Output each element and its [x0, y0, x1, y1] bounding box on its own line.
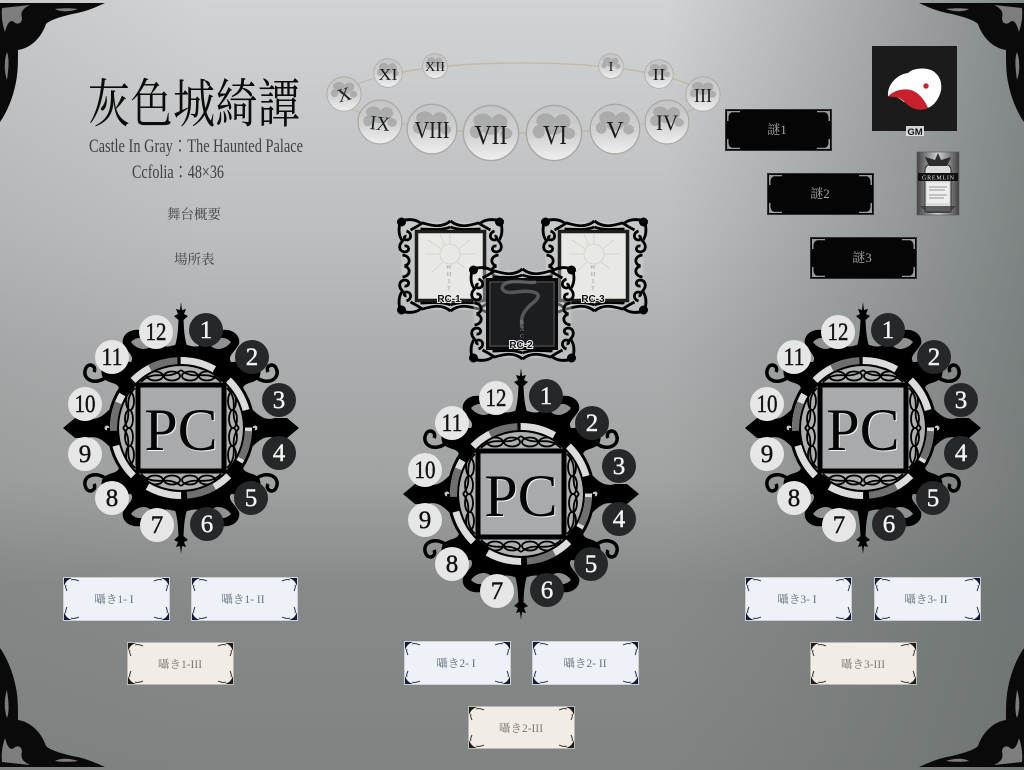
corner ornament top left: [0, 3, 105, 122]
GM label: GM: [907, 127, 923, 138]
moon IX: IX: [369, 112, 392, 136]
moon VI: VI: [543, 120, 567, 150]
icon: sun: [570, 234, 620, 272]
PC clock left: [63, 302, 299, 554]
whisper card 3-II: 囁き3- II: [904, 593, 948, 606]
moon II: [645, 60, 673, 88]
clock numbers: 1: [200, 317, 212, 344]
moon VII: VII: [474, 120, 508, 150]
whisper card 1-I: 囁き1- I: [94, 593, 134, 606]
whisper card 3-II: [874, 578, 980, 620]
RC frame 1: [397, 218, 504, 314]
PC text: PC: [144, 397, 218, 463]
whisper card 2-II: 囁き2- II: [563, 657, 607, 670]
RC frame 3: T: [591, 286, 595, 292]
moon VIII: VIII: [414, 118, 450, 144]
RC-2 label: RC-2: [509, 340, 533, 351]
clock numbers: 6: [201, 511, 213, 538]
PC clock right: [745, 302, 981, 554]
moon IV: [645, 100, 689, 144]
icon: bird: [888, 69, 941, 110]
icon: smoke: [502, 281, 538, 328]
whisper card 1-I: [64, 578, 170, 620]
clock numbers: 4: [613, 506, 626, 533]
clock numbers: 4: [273, 440, 286, 467]
ccfolia size: Ccfolia：48×36: [132, 162, 224, 183]
moon I: [599, 54, 623, 78]
whisper card 2-I: 囁き2- I: [436, 657, 476, 670]
clock numbers: 9: [419, 507, 431, 534]
RC frame 1: I: [448, 279, 450, 285]
subtitle: Castle In Gray：The Haunted Palace: [89, 136, 303, 157]
RC frame 2: [469, 266, 576, 362]
whisper card 3-I: [746, 578, 852, 620]
clock numbers: 10: [756, 391, 778, 418]
PC text: PC: [484, 463, 558, 529]
RC frame 3: I: [592, 279, 594, 285]
clock numbers: 11: [102, 344, 122, 371]
clock numbers: 2: [586, 410, 598, 437]
moon XI: [374, 59, 402, 87]
RC frame 3: H: [591, 272, 596, 278]
moon IX: [358, 100, 402, 144]
whisper card 1-III: 囁き1-III: [158, 658, 202, 671]
clock numbers: 4: [955, 440, 968, 467]
clock numbers: [68, 313, 296, 542]
clock numbers: 9: [79, 441, 91, 468]
clock numbers: [750, 313, 978, 542]
clock numbers: 7: [491, 578, 503, 605]
riddle card 2: 謎2: [810, 186, 830, 201]
clock numbers: 7: [833, 512, 845, 539]
clock numbers: 8: [788, 485, 800, 512]
clock numbers: 3: [273, 387, 285, 414]
clock numbers: 11: [442, 410, 462, 437]
moon XI: XI: [378, 65, 398, 84]
clock numbers: 10: [414, 457, 436, 484]
moon X: [327, 77, 361, 111]
RC frame 3: W: [590, 265, 596, 271]
clock numbers: 12: [828, 319, 848, 346]
riddle card 1: 謎1: [767, 122, 787, 137]
moon VIII: [407, 104, 457, 154]
clock numbers: 1: [540, 383, 552, 410]
whisper card 3-III: [810, 642, 916, 684]
moon X: X: [335, 83, 354, 107]
link: location table: 場所表: [174, 251, 215, 267]
RC frame 1: W: [446, 265, 452, 271]
clock numbers: 12: [486, 385, 506, 412]
RC frame 1: H: [447, 272, 452, 278]
moon XII: XII: [425, 60, 445, 75]
RC frame 2: C: [520, 334, 524, 340]
whisper card 1-III: [128, 642, 234, 684]
RC frame 2: A: [520, 327, 525, 333]
whisper card 2-III: 囁き2-III: [499, 722, 543, 735]
link: stage overview: 舞台概要: [167, 206, 221, 222]
moon III: III: [694, 85, 712, 107]
clock numbers: 5: [927, 485, 939, 512]
moon clock: [327, 54, 720, 161]
clock numbers: 3: [955, 387, 967, 414]
clock numbers: 7: [151, 512, 163, 539]
clock numbers: 12: [146, 319, 166, 346]
whisper card 2-I: [404, 642, 510, 684]
gremlin card: GREMLIN: [922, 176, 955, 182]
clock numbers: 5: [245, 485, 257, 512]
RC-3 label: RC-3: [581, 294, 605, 305]
PC text: PC: [826, 397, 900, 463]
moon III: [686, 77, 720, 111]
riddle card 1: [725, 109, 832, 151]
moon V: [590, 104, 640, 154]
riddle card 2: [767, 173, 874, 215]
corner ornament top right: [919, 3, 1024, 122]
PC clock center: [403, 368, 639, 620]
riddle card 3: 謎3: [852, 250, 872, 265]
moon IV: IV: [656, 110, 678, 135]
moon II: II: [652, 65, 666, 84]
clock numbers: 9: [761, 441, 773, 468]
corner ornament bottom left: [0, 648, 105, 767]
clock numbers: [408, 379, 636, 608]
clock numbers: 2: [246, 344, 258, 371]
clock numbers: 10: [74, 391, 96, 418]
clock numbers: 6: [541, 577, 553, 604]
clock numbers: 3: [613, 453, 625, 480]
RC frame 2: B: [520, 320, 524, 326]
clock numbers: 5: [585, 551, 597, 578]
clock numbers: 8: [446, 551, 458, 578]
clock numbers: 11: [784, 344, 804, 371]
whisper card 1-II: 囁き1- II: [221, 593, 265, 606]
corner ornament bottom right: [919, 648, 1024, 767]
icon: sun: [426, 234, 476, 272]
whisper card 1-II: [192, 578, 298, 620]
title: 灰色城綺譚: [88, 77, 300, 134]
gremlin card: [917, 152, 959, 215]
moon I: I: [609, 60, 614, 75]
moon VII: [463, 105, 519, 161]
RC frame 1: T: [447, 286, 451, 292]
riddle card 3: [810, 237, 917, 279]
clock numbers: 8: [106, 485, 118, 512]
moon V: V: [606, 118, 624, 144]
clock numbers: 2: [928, 344, 940, 371]
moon XII: [423, 54, 447, 78]
clock numbers: 1: [882, 317, 894, 344]
RC-1 label: RC-1: [437, 294, 461, 305]
whisper card 2-II: [532, 642, 638, 684]
clock numbers: 6: [883, 511, 895, 538]
whisper card 3-I: 囁き3- I: [777, 593, 817, 606]
GM token: [872, 46, 957, 138]
moon VI: [526, 105, 582, 161]
RC frame 3: [541, 218, 648, 314]
whisper card 2-III: [468, 706, 574, 748]
whisper card 3-III: 囁き3-III: [841, 658, 885, 671]
